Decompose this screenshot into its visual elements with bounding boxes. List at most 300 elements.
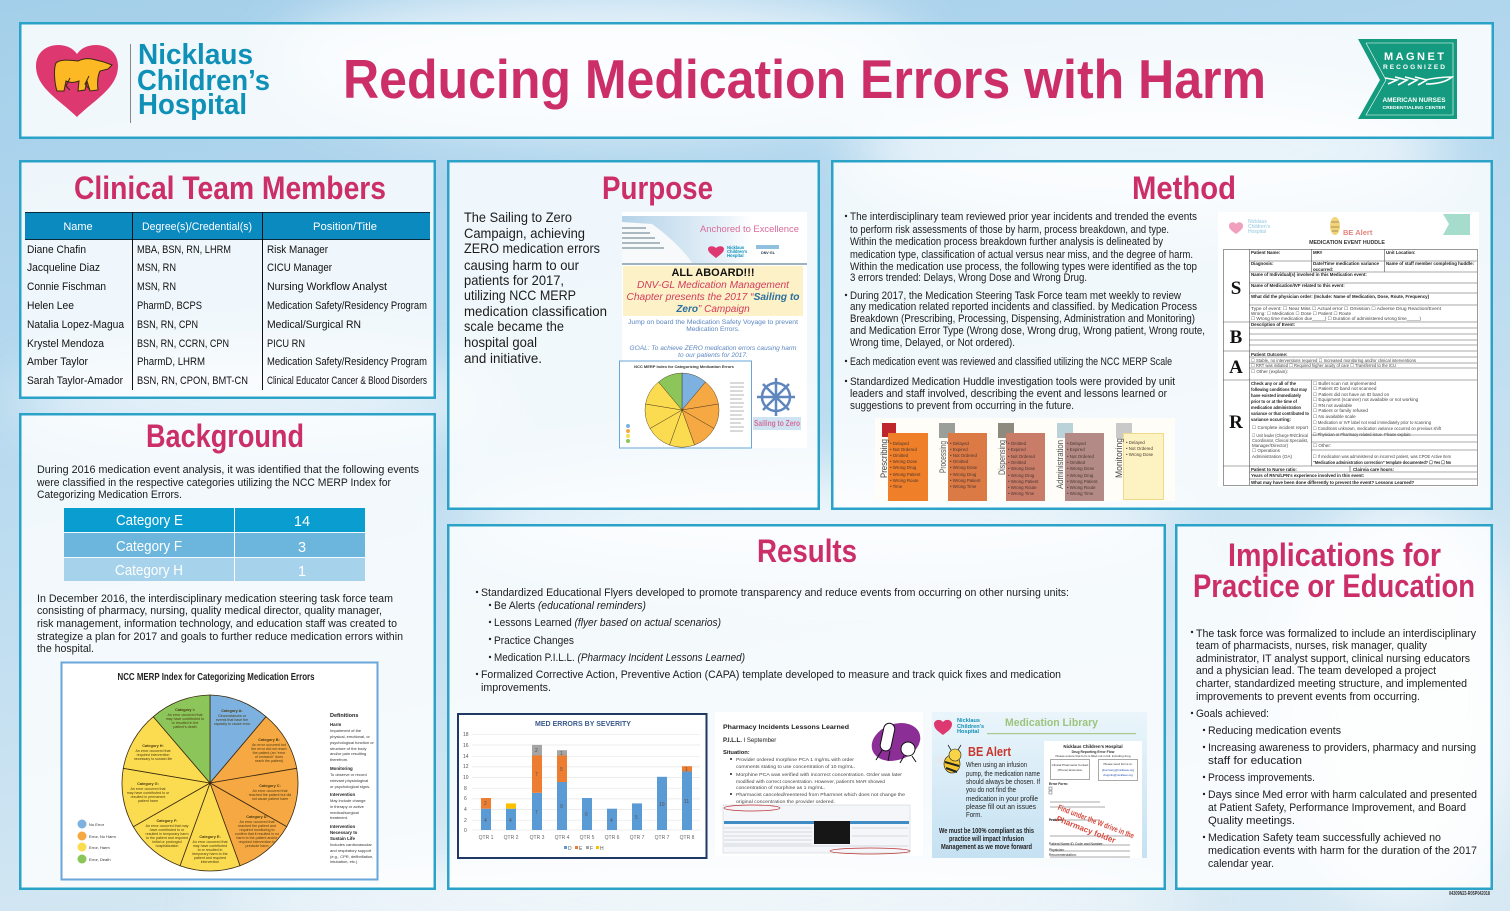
definitions: Definitions bbox=[330, 713, 358, 719]
dispensing column: Dispensing bbox=[997, 440, 1007, 475]
mini NCC MERP chart: NCC MERP Index for Categorizing Medication Errors bbox=[634, 364, 735, 369]
chart legend bbox=[564, 846, 604, 852]
purpose text bbox=[464, 210, 607, 366]
administration column: • Omitted bbox=[1067, 460, 1086, 465]
medication event huddle form: have existed immediately bbox=[1251, 393, 1302, 398]
implications text: Goals achieved: bbox=[1196, 708, 1269, 720]
sailing to zero flyer: Children’s bbox=[727, 249, 748, 254]
processing column: • Not Ordered bbox=[950, 453, 977, 458]
x axis labels: QTR 2 bbox=[504, 835, 519, 841]
pie labels: temporary harm to the bbox=[192, 852, 228, 856]
y axis labels: 4 bbox=[464, 807, 467, 813]
team table: Medical/Surgical RN bbox=[267, 319, 361, 331]
pie labels: necessary to sustain life bbox=[134, 757, 172, 761]
pie labels: reached the patient but did bbox=[249, 793, 291, 797]
pie labels: not cause patient harm bbox=[252, 797, 288, 801]
implications text: Process improvements. bbox=[1208, 772, 1315, 784]
team table: MBA, BSN, RN, LHRM bbox=[137, 244, 231, 256]
medication event huddle form: Coordinator, Clinical Specialist, bbox=[1252, 438, 1308, 443]
definitions: intubation, etc.) bbox=[330, 859, 358, 864]
drug reporting form: Patient Name ID Code and Number: bbox=[1049, 842, 1104, 846]
implications text: Increasing awareness to providers, pharmacy and nursing bbox=[1208, 742, 1476, 754]
implications text: staff for education bbox=[1208, 755, 1302, 767]
medication event huddle form: Check any or all of the bbox=[1251, 381, 1297, 386]
pie labels: An error occurred that bbox=[131, 787, 165, 791]
results text: Lessons Learned (flyer based on actual scenarios) bbox=[494, 617, 721, 629]
drug reporting form: Please send forms to: bbox=[1103, 762, 1133, 766]
sailing to zero flyer: Zero” Campaign bbox=[675, 304, 750, 315]
print code: 04309N23-R05P042018 bbox=[1449, 891, 1490, 897]
sailing to zero flyer: Nicklaus bbox=[727, 245, 745, 250]
pharmacy incidents lessons learned flyer: Pharmacist canceled/reentered from Pharmnet which does not change the bbox=[736, 792, 905, 797]
medication event huddle form: ☐ Conditions unknown, medication variance occurred on previous shift bbox=[1313, 426, 1442, 431]
pie labels: to the patient and required bbox=[146, 836, 188, 840]
definitions: or psychological signs. bbox=[330, 784, 370, 789]
sailing to zero flyer: Anchored to Excellence bbox=[700, 224, 799, 234]
results text: Be Alerts (educational reminders) bbox=[494, 600, 646, 612]
medication event huddle form: Name of staff member completing huddle: bbox=[1386, 261, 1475, 266]
drug reporting form: Nicklaus Children’s Hospital bbox=[1063, 744, 1123, 749]
team table: MSN, RN bbox=[137, 281, 176, 293]
pharmacy incidents lessons learned flyer: Provider ordered morphine PCA 1 mg/mL with order bbox=[736, 757, 855, 762]
administration column: • Wrong Patient bbox=[1067, 479, 1098, 484]
icon: pill characters bbox=[866, 717, 926, 767]
pie labels: reached the patient and bbox=[238, 824, 276, 828]
bar value labels: 1 bbox=[685, 767, 688, 773]
medication event huddle form: Hospital bbox=[1248, 229, 1266, 235]
dispensing column: • Omitted bbox=[1008, 460, 1027, 465]
header panel bbox=[20, 23, 1493, 138]
steering task force text: strategize a plan for 2017 and goals to further reduce medication errors within bbox=[37, 631, 403, 643]
pie labels: Category G: bbox=[137, 782, 159, 786]
pie labels: may have contributed bbox=[193, 844, 227, 848]
medication event huddle form: Diagnosis: bbox=[1251, 261, 1274, 266]
medication event huddle form: ☐ Operations bbox=[1252, 448, 1281, 453]
administration column: • Expired bbox=[1067, 447, 1085, 452]
implications text: medication events with harm for the duration of the 2017 bbox=[1208, 845, 1477, 857]
medication event huddle form: ☐ Unit leader (Charge RN/Clinical bbox=[1252, 433, 1308, 438]
method text: Standardized Medication Huddle investigation tools were provided by unit bbox=[850, 376, 1176, 388]
implications text: charter, standardized meeting structure, and implemented bbox=[1196, 678, 1467, 690]
intro text: During 2016 medication event analysis, it was identified that the following events bbox=[37, 464, 419, 476]
pie labels: events that have the bbox=[216, 718, 248, 722]
method text: During 2017, the Medication Steering Task Force team met weekly to review bbox=[850, 290, 1182, 302]
pie labels: An error occurred that may bbox=[146, 824, 189, 828]
pie labels: resulted in permanent bbox=[131, 795, 165, 799]
prescribing column: • Delayed bbox=[890, 441, 909, 446]
dispensing column: • Not Ordered bbox=[1008, 454, 1035, 459]
processing column: • Expired bbox=[950, 447, 968, 452]
purpose text: hospital goal bbox=[464, 335, 537, 350]
hospital logo: Hospital bbox=[138, 89, 247, 121]
definitions: therefrom. bbox=[330, 757, 348, 762]
medication event huddle form: A bbox=[1229, 357, 1243, 378]
medication event huddle form: Name of Individual(s) involved in this Medication event: bbox=[1251, 272, 1367, 277]
pie labels: Category E: bbox=[199, 835, 221, 839]
medication event huddle form: What may have been done differently to prevent the event? Lessons Learned? bbox=[1251, 480, 1415, 485]
y axis labels: 8 bbox=[464, 786, 467, 792]
category table: 14 bbox=[294, 514, 310, 530]
definitions: relevant physiological bbox=[330, 778, 368, 783]
administration column: • Not Ordered bbox=[1067, 454, 1094, 459]
y axis labels: 12 bbox=[463, 764, 469, 770]
bar value labels bbox=[484, 748, 689, 824]
medication event huddle form: BE Alert bbox=[1343, 228, 1373, 237]
drug reporting form: Please ensure that form is filled out in full, including drug bbox=[1055, 754, 1131, 758]
implications text: improvements to prevent events from occurring. bbox=[1196, 691, 1420, 703]
method text: The interdisciplinary team reviewed prior year incidents and trended the events bbox=[850, 211, 1197, 223]
definitions: (e.g., CPR, defibrillation, bbox=[330, 854, 373, 859]
medication event huddle form: ☐ Patient ID band not scanned bbox=[1313, 386, 1377, 391]
pie labels: have contributed to or bbox=[150, 828, 185, 832]
heading: Clinical Team Members bbox=[74, 170, 386, 206]
administration column: • Delayed bbox=[1067, 441, 1086, 446]
heading: Implications for bbox=[1228, 537, 1441, 573]
pie labels: may have contributed to or bbox=[127, 791, 170, 795]
definitions: structure of the body bbox=[330, 746, 366, 751]
bar value labels: 4 bbox=[509, 818, 512, 824]
drug reporting form: Drug Reporting Error Flow bbox=[1072, 750, 1115, 754]
pie labels: Category F: bbox=[156, 819, 178, 823]
definitions: Intervention bbox=[330, 824, 355, 829]
results text bbox=[476, 587, 1069, 694]
pie labels: reach the patient) bbox=[255, 759, 283, 763]
medication event huddle form: occurred: bbox=[1313, 267, 1334, 272]
dispensing column: • Wrong Time bbox=[1008, 491, 1035, 496]
medication library flyer: BE Alert bbox=[968, 744, 1012, 759]
method text: Within the medication use process, the following types were identified as the top bbox=[850, 261, 1197, 273]
definitions: Intervention bbox=[330, 792, 355, 797]
magnet recognized badge: RECOGNIZED bbox=[1383, 64, 1445, 71]
chart: med errors by severity bbox=[458, 714, 706, 858]
medication library flyer: Form. bbox=[966, 810, 982, 819]
definitions: Includes cardiovascular bbox=[330, 842, 372, 847]
medication library flyer: Management as we move forward bbox=[941, 842, 1032, 851]
medication library flyer: should always be chosen. If bbox=[966, 777, 1041, 786]
team table: Krystel Mendoza bbox=[27, 338, 105, 350]
purpose text: patients for 2017, bbox=[464, 273, 564, 288]
medication event huddle form: ☐ RRT was initiated ☐ Required higher acuity of care ☐ Transferred to the ICU bbox=[1251, 363, 1396, 368]
team table: Diane Chafin bbox=[27, 244, 86, 256]
method text: Breakdown (Prescribing, Processing, Dispensing, Administration and Monitoring) bbox=[850, 313, 1195, 325]
pie labels: required monitoring to bbox=[240, 828, 274, 832]
purpose text: and initiative. bbox=[464, 351, 542, 366]
x axis labels: QTR 1 bbox=[479, 835, 494, 841]
medication event huddle form: Clairvia care hours: bbox=[1353, 467, 1395, 472]
prescribing column: • Omitted bbox=[890, 453, 909, 458]
pie bbox=[122, 695, 298, 871]
prescribing column: • Wrong Route bbox=[890, 478, 919, 483]
medication process breakdown graphic bbox=[875, 418, 1175, 501]
medication event huddle form: Administration (OA) bbox=[1252, 454, 1293, 459]
drug reporting form: Clinical Pharmacist Contact bbox=[1052, 763, 1089, 767]
administration column bbox=[1055, 423, 1104, 501]
sailing to zero flyer bbox=[620, 212, 807, 448]
purpose text: Campaign, achieving bbox=[464, 226, 585, 241]
results text: Standardized Educational Flyers developed to promote transparency and reduce events from occurring on other nursing units: bbox=[481, 587, 1069, 599]
icon: bee bbox=[935, 745, 961, 773]
prescribing column: • Not Ordered bbox=[890, 447, 917, 452]
ship wheel icon bbox=[757, 378, 795, 416]
category table bbox=[64, 508, 365, 581]
medication event huddle form: variance occurring: bbox=[1251, 417, 1292, 422]
method text: leaders and staff involved, describing the event and lessons learned or bbox=[850, 388, 1167, 400]
definitions: in therapy or active bbox=[330, 804, 365, 809]
implications text: Reducing medication events bbox=[1208, 725, 1341, 737]
medication event huddle form: variance or that contributed to bbox=[1251, 411, 1309, 416]
pharmacy incidents lessons learned flyer: concentration of morphine as 1 mg/mL. bbox=[736, 785, 825, 790]
chart legend: E bbox=[579, 846, 583, 852]
medication event huddle form: following conditions that may bbox=[1251, 387, 1307, 392]
legend: Error, Death bbox=[89, 857, 111, 862]
pie labels: the error did not reach bbox=[251, 747, 287, 751]
bar value labels: 11 bbox=[684, 799, 689, 805]
team table: Sarah Taylor-Amador bbox=[27, 375, 123, 387]
pie labels: Category A: bbox=[221, 709, 243, 713]
mini NCC MERP chart bbox=[620, 361, 752, 448]
medication event huddle form: ☐ Equipment (scanner) not available or not working bbox=[1313, 397, 1419, 402]
medication event huddle form: Unit Location: bbox=[1386, 250, 1416, 255]
administration column: • Wrong Drug bbox=[1067, 473, 1094, 478]
prescribing column: • Time bbox=[890, 484, 903, 489]
bar value labels: 5 bbox=[560, 767, 563, 773]
medication library flyer bbox=[932, 712, 1147, 858]
implications text: Medication Safety team successfully achieved no bbox=[1208, 832, 1441, 844]
definitions: physical, emotional, or bbox=[330, 734, 370, 739]
medication event huddle form: ☐ Bullet scan not implemented bbox=[1313, 381, 1377, 386]
implications text: administrator, IT analyst support, clinical nursing educators bbox=[1196, 653, 1470, 665]
purpose text: medication classification bbox=[464, 304, 607, 319]
medication event huddle form: S bbox=[1231, 278, 1241, 299]
team table: Natalia Lopez-Magua bbox=[27, 319, 125, 331]
results text: Medication P.I.L.L. (Pharmacy Incident Lessons Learned) bbox=[494, 652, 745, 664]
pharmacy incidents lessons learned flyer: Situation: bbox=[723, 750, 750, 756]
sailing to zero flyer: Jump on board the Medication Safety Voyage to prevent bbox=[628, 319, 798, 326]
medication event huddle form: R bbox=[1229, 412, 1243, 433]
y axis labels bbox=[463, 732, 469, 834]
prescribing column: • Wrong Dose bbox=[890, 459, 918, 464]
sailing to zero flyer: ALL ABOARD!!! bbox=[671, 267, 755, 279]
x axis labels: QTR 8 bbox=[680, 835, 695, 841]
legend: No Error bbox=[89, 822, 105, 827]
hospital logo: Nicklaus bbox=[138, 39, 253, 71]
team table: BSN, RN, CCRN, CPN bbox=[137, 338, 229, 350]
drug reporting form: Physician: bbox=[1049, 848, 1065, 852]
method text: 3 errors trended: Delays, Wrong Dose and Wrong Drug. bbox=[850, 272, 1087, 284]
x axis labels: QTR 7 bbox=[655, 835, 670, 841]
processing column: • Omitted bbox=[950, 459, 969, 464]
x axis labels: QTR 4 bbox=[555, 835, 570, 841]
dispensing column: • Omitted bbox=[1008, 441, 1027, 446]
category table: Category H bbox=[115, 563, 183, 579]
panel: clinical team members bbox=[20, 161, 435, 398]
magnet recognized badge bbox=[1358, 39, 1457, 119]
y axis labels: 16 bbox=[463, 743, 469, 749]
dispensing column: • Wrong Drug bbox=[1008, 473, 1035, 478]
bar value labels: 2 bbox=[484, 801, 487, 807]
prescribing column: • Wrong Drug bbox=[890, 465, 917, 470]
processing column: • Delayed bbox=[950, 441, 969, 446]
definitions bbox=[330, 713, 374, 864]
pie labels: An error occurred that bbox=[136, 749, 170, 753]
team table: Nursing Workflow Analyst bbox=[267, 281, 388, 293]
team table: PICU RN bbox=[267, 338, 305, 350]
x axis labels: QTR 5 bbox=[580, 835, 595, 841]
bar value labels: 10 bbox=[659, 802, 665, 808]
pharmacy incidents lessons learned flyer bbox=[715, 712, 926, 856]
NCC MERP index chart bbox=[62, 662, 378, 880]
purpose text: causing harm to our bbox=[464, 258, 579, 273]
processing column: • Wrong Patient bbox=[950, 478, 981, 483]
method text: Each medication event was reviewed and classified utilizing the NCC MERP Scale bbox=[850, 356, 1172, 368]
method text: medication type, classification of actual versus near miss, and the degree of harm. bbox=[850, 249, 1193, 261]
team table: Jacqueline Diaz bbox=[27, 262, 100, 274]
definitions: and/or pain resulting bbox=[330, 751, 366, 756]
medication event huddle form: ☐ Other (explain): bbox=[1251, 369, 1288, 374]
medication event huddle form: Description of Event: bbox=[1251, 322, 1296, 327]
definitions: Monitoring bbox=[330, 766, 353, 771]
x axis labels: QTR 6 bbox=[605, 835, 620, 841]
pie labels: capacity to cause error bbox=[214, 722, 251, 726]
pie labels: required intervention to bbox=[239, 840, 275, 844]
pie labels: Category H: bbox=[142, 744, 164, 748]
pie labels: of omission” does bbox=[255, 755, 283, 759]
bar value labels: 6 bbox=[585, 812, 588, 818]
legend: Error, Harm bbox=[89, 845, 110, 850]
red note: Find under the W drive in the bbox=[1056, 803, 1136, 841]
medication event huddle form: ☐ Physician or Pharmacy related issue. Please explain: bbox=[1313, 432, 1411, 437]
drug reporting form: Problem bbox=[1049, 818, 1063, 822]
sailing to zero flyer: GOAL: To achieve ZERO medication errors causing harm bbox=[630, 345, 797, 352]
method text: Within the medication process breakdown further analysis is delineated by bbox=[850, 236, 1163, 248]
hospital logo: Children’s bbox=[137, 65, 270, 97]
heading: Purpose bbox=[602, 170, 713, 206]
category table: Category E bbox=[116, 513, 183, 529]
pharmacy incidents lessons learned flyer: Morphine PCA was verified with incorrect concentration. Order was later bbox=[736, 772, 903, 777]
team table: Connie Fischman bbox=[27, 281, 106, 293]
drug reporting form: druginfo@nicklaus.org bbox=[1103, 773, 1133, 777]
medication event huddle form: medication administration bbox=[1251, 405, 1301, 410]
x axis labels: QTR 3 bbox=[530, 835, 545, 841]
drug reporting form bbox=[1044, 741, 1142, 858]
purpose text: The Sailing to Zero bbox=[464, 210, 572, 225]
method text bbox=[845, 211, 1205, 412]
pie labels: resulted in temporary harm bbox=[146, 832, 188, 836]
definitions: To observe or record bbox=[330, 772, 367, 777]
pie labels: patient’s death bbox=[173, 725, 197, 729]
sailing to zero flyer: Chapter presents the 2017 “ Sailing to bbox=[626, 292, 800, 303]
NCC MERP index chart: NCC MERP Index for Categorizing Medication Errors bbox=[118, 672, 315, 683]
pie labels: preclude harm bbox=[246, 844, 268, 848]
pharmacy incidents lessons learned flyer: Pharmacy Incidents Lessons Learned bbox=[723, 724, 849, 731]
prescribing column: • Wrong Patient bbox=[890, 472, 921, 477]
steering task force text: risk management, information technology, and education staff was created to bbox=[37, 618, 397, 630]
administration column: Administration bbox=[1055, 440, 1065, 489]
title: Reducing Medication Errors with Harm bbox=[343, 48, 1266, 110]
pie labels: Circumstances or bbox=[218, 714, 247, 718]
medication event huddle form: MR# bbox=[1313, 250, 1323, 255]
team table: Medication Safety/Residency Program bbox=[267, 300, 427, 312]
processing column: • Wrong Drug bbox=[950, 472, 977, 477]
sailing to zero flyer: Sailing to Zero bbox=[754, 419, 800, 428]
pie labels: An error occurred but bbox=[252, 743, 286, 747]
sailing to zero flyer: DNV-GL Medication Management bbox=[637, 280, 790, 291]
implications text: and a physician lead. The team developed a project bbox=[1196, 665, 1437, 677]
pie labels: An error occurred that bbox=[240, 820, 274, 824]
medication event huddle form: What did the physician order: (Include: Name of Medication, Dose, Route, Frequency) bbox=[1251, 294, 1430, 299]
team table: Risk Manager bbox=[267, 244, 328, 256]
medication library flyer: practice will impact Infusion bbox=[949, 834, 1024, 843]
bar value labels: 4 bbox=[484, 818, 487, 824]
monitoring column: • Not Ordered bbox=[1126, 446, 1153, 451]
team table bbox=[25, 212, 430, 390]
medication event huddle form: Date/Time medication variance bbox=[1313, 261, 1380, 266]
steering task force text: the hospital. bbox=[37, 643, 94, 655]
grid lines bbox=[472, 734, 700, 830]
magnet recognized badge: MAGNET bbox=[1384, 51, 1444, 63]
administration column: • Wrong Route bbox=[1067, 485, 1096, 490]
monitoring column: • Wrong Dose bbox=[1126, 452, 1154, 457]
implications text: Quality meetings. bbox=[1208, 815, 1295, 827]
implications text: at Patient Safety, Performance Improvement, and Board bbox=[1208, 802, 1466, 814]
panel: purpose bbox=[448, 161, 819, 509]
pie labels: hospitalization bbox=[156, 844, 178, 848]
medication event huddle form: ☐ Other: bbox=[1313, 443, 1331, 448]
medication library flyer: medication in your profile bbox=[966, 794, 1038, 803]
y axis labels: 14 bbox=[463, 754, 469, 760]
medication event huddle form: Patient to Nurse ratio: bbox=[1251, 467, 1297, 472]
medication event huddle form: ☐ Medication or IVF label not read immediately prior to scanning bbox=[1313, 420, 1431, 425]
sailing to zero flyer: Medication Errors. bbox=[686, 326, 740, 333]
drug reporting form: (Phone) Extension bbox=[1058, 768, 1083, 772]
medication event huddle form: Patient Name: bbox=[1251, 250, 1281, 255]
results text: Formalized Corrective Action, Preventive Action (CAPA) template developed to measure and track quick fixes and medication bbox=[481, 669, 1061, 681]
medication event huddle form: MEDICATION EVENT HUDDLE bbox=[1309, 240, 1385, 246]
pie labels: initial or prolonged bbox=[152, 840, 182, 844]
dispensing column: • Wrong Route bbox=[1008, 485, 1037, 490]
pie labels: harm to the patient and/or bbox=[236, 836, 278, 840]
y axis labels: 6 bbox=[464, 796, 467, 802]
y axis labels: 10 bbox=[463, 775, 469, 781]
pie labels: Category B: bbox=[258, 738, 280, 742]
results text: improvements. bbox=[481, 682, 551, 694]
medication event huddle form: ☐ Patient did not have an ID band on bbox=[1313, 392, 1390, 397]
hospital logo bbox=[36, 39, 270, 123]
team table: BSN, RN, CPON, BMT-CN bbox=[137, 375, 248, 387]
monitoring column bbox=[1114, 423, 1164, 500]
medication event huddle form: ☐ No available scale bbox=[1313, 414, 1356, 419]
bar value labels: 2 bbox=[535, 748, 538, 754]
panel: method bbox=[832, 161, 1492, 509]
intro text: were classified in the respective categories utilizing the NCC MERP Index for bbox=[36, 477, 391, 489]
bee icon bbox=[1330, 217, 1340, 235]
medication event huddle form: B bbox=[1230, 327, 1243, 348]
method text: suggestions to prevent from occurring in the future. bbox=[850, 400, 1074, 412]
medication event huddle form: ☐ RN not available bbox=[1313, 403, 1353, 408]
purpose text: scale became the bbox=[464, 319, 564, 334]
sailing to zero flyer: to our patients for 2017. bbox=[678, 352, 748, 359]
dispensing column: • Wrong Patient bbox=[1008, 479, 1039, 484]
medication event huddle form: Type of event: ☐ Near Miss ☐ Actual error ☐ Omission ☐ Adverse Drug Reaction/Event bbox=[1251, 306, 1442, 311]
medication event huddle form: “Medication administration correction” template documented? ☐ Yes ☐ No bbox=[1313, 460, 1451, 465]
medication event huddle form: ☐ If medication was administered on incorrect patient, was CPOE Active Item bbox=[1313, 454, 1451, 459]
chart legend: H bbox=[600, 846, 604, 852]
heading: Background bbox=[146, 418, 304, 454]
definitions: and respiratory support bbox=[330, 848, 372, 853]
method text: and Medication Error Type (Wrong dose, Wrong drug, Wrong patient, Wrong route, bbox=[850, 325, 1205, 337]
pharmacy incidents lessons learned flyer: modified with correct concentration. However, patient’s MAR showed bbox=[736, 779, 885, 784]
dispensing column: • Expired bbox=[1008, 447, 1026, 452]
